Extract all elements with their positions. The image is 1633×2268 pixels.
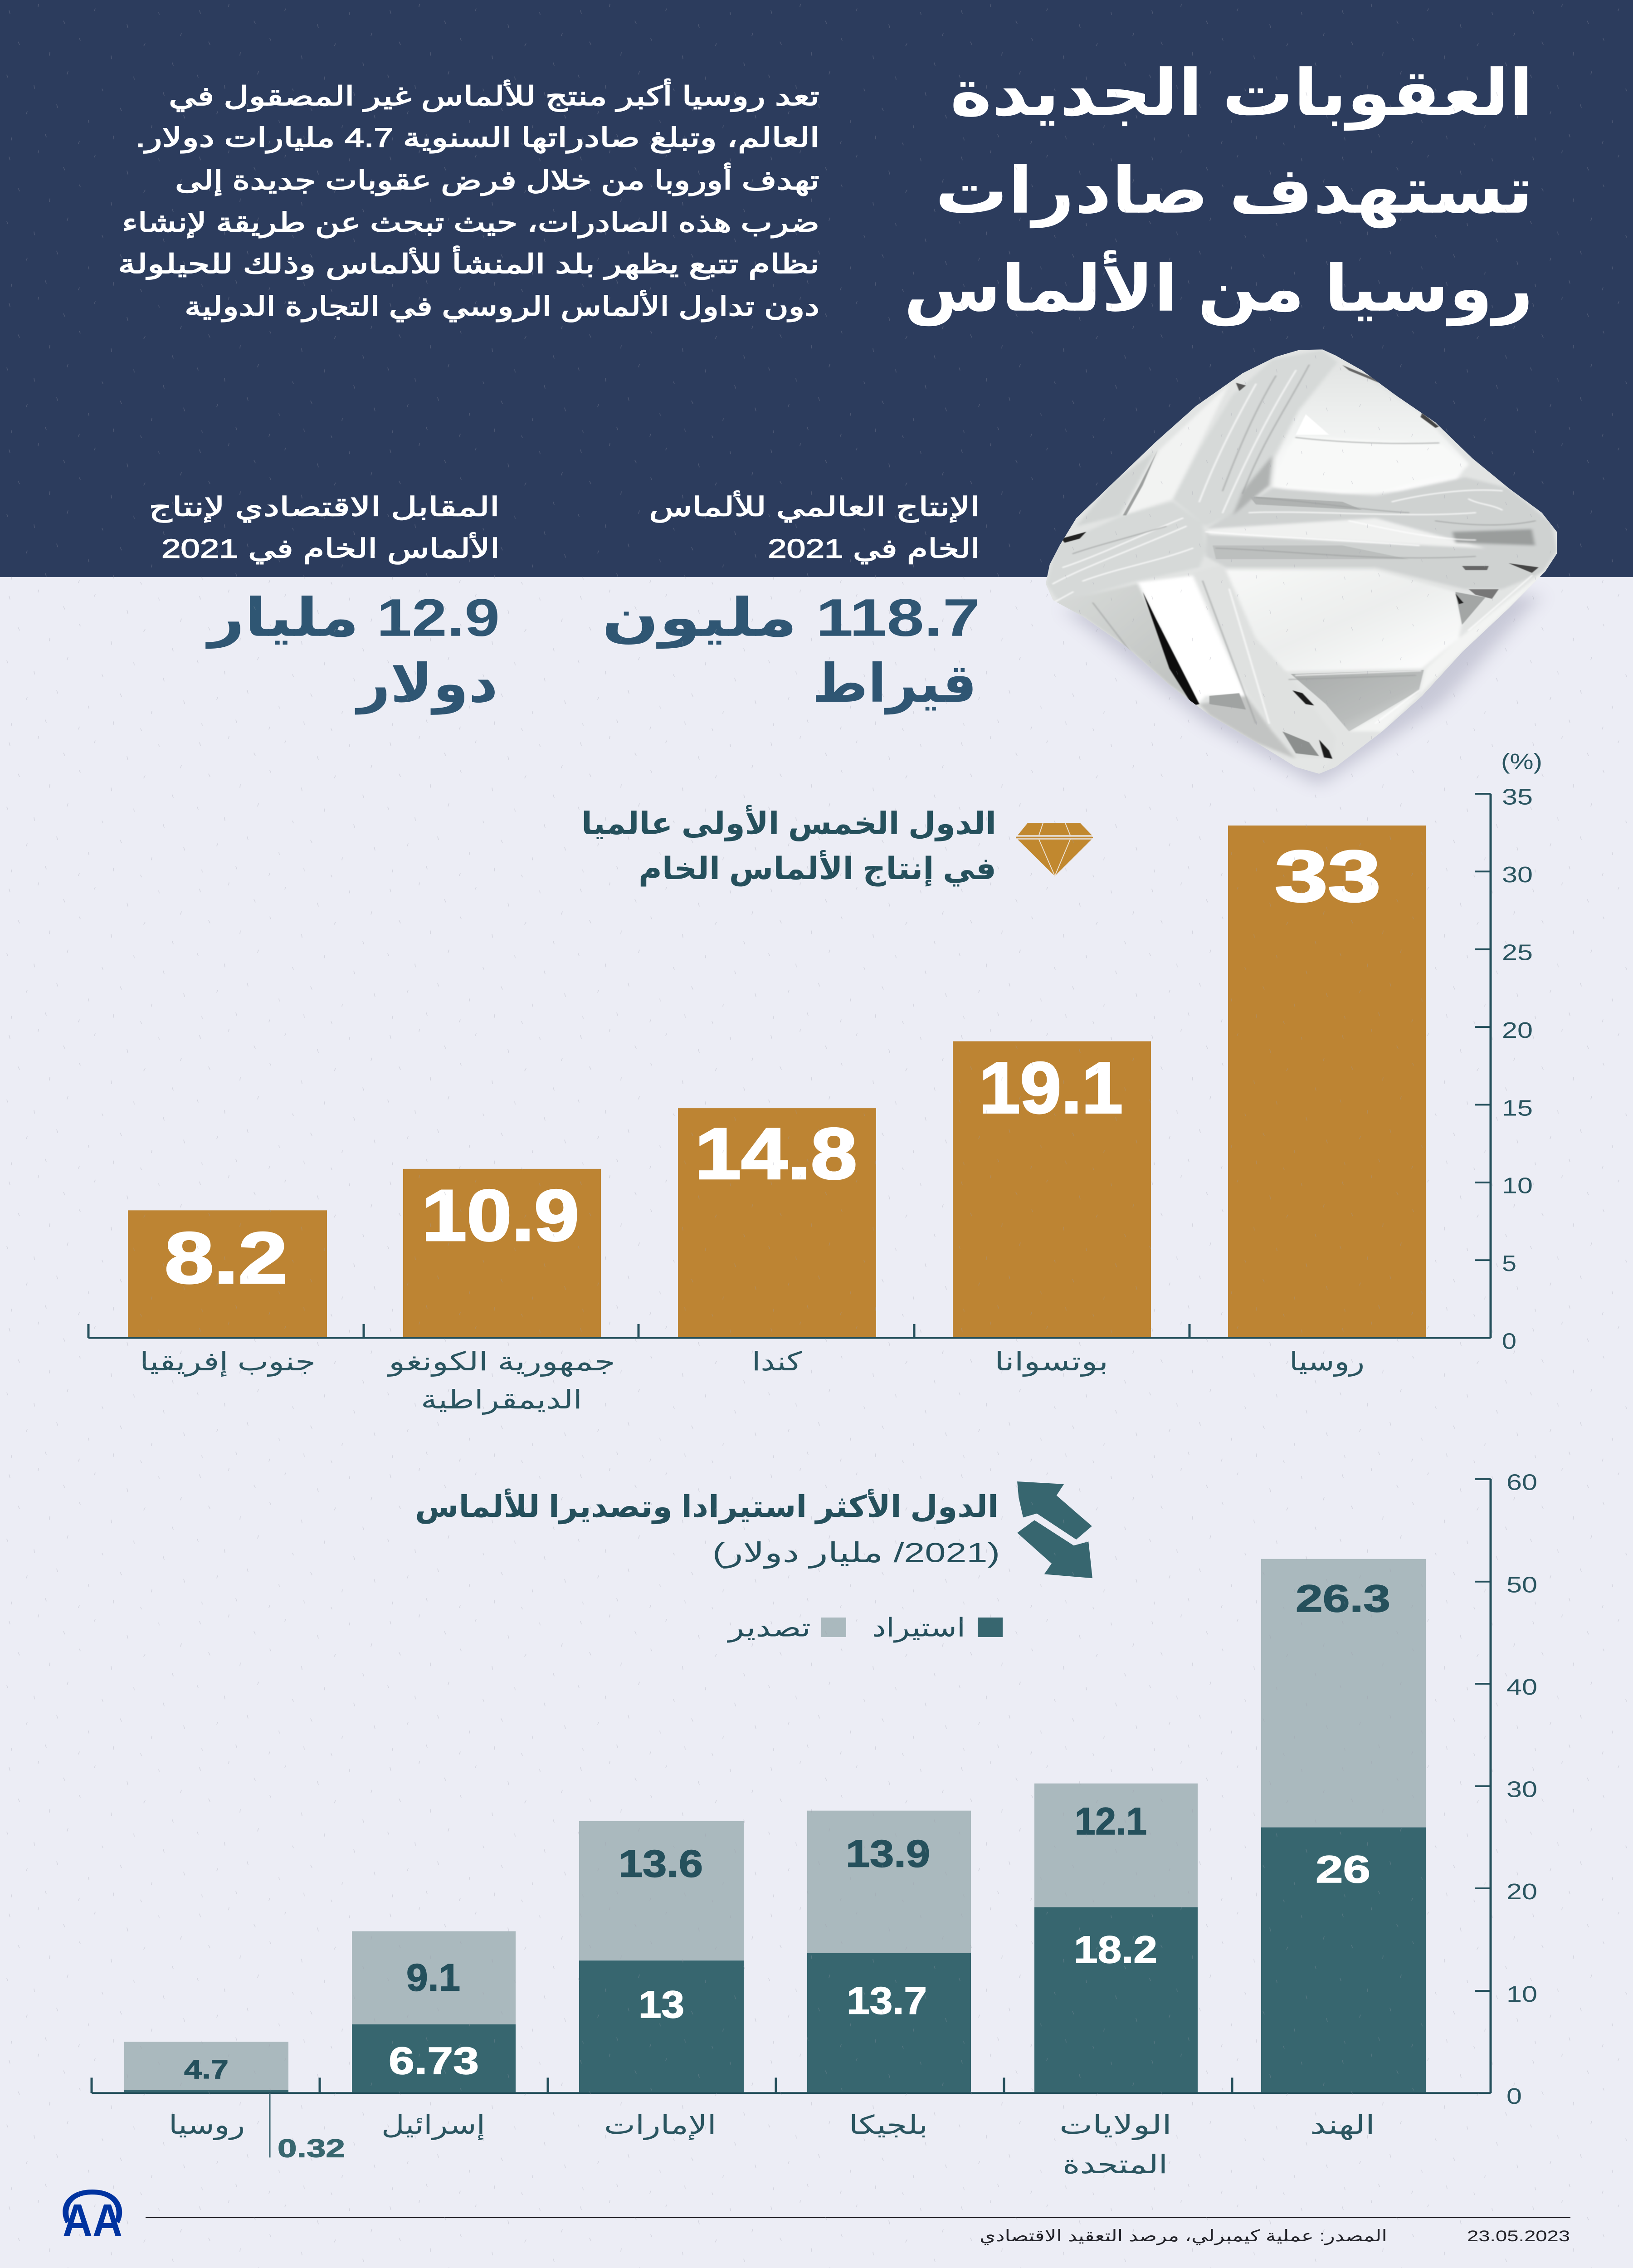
bar: India: 26 xyxy=(1316,1848,1370,1891)
icon: import export arrows xyxy=(1017,1481,1092,1578)
bar: Botswana xyxy=(953,1041,1151,1338)
y axis: 0 xyxy=(1506,2084,1522,2109)
intro paragraph: تعد روسيا أكبر منتج للألماس غير المصقول في xyxy=(169,78,819,112)
y axis xyxy=(1475,749,1542,1354)
intro paragraph: دون تداول الألماس الروسي في التجارة الدولية xyxy=(185,290,819,322)
bar: Israel: 6.73 xyxy=(389,2039,479,2082)
category labels: جمهورية الكونغو xyxy=(387,1347,615,1377)
stat label: الخام في 2021 xyxy=(768,534,980,564)
bar: United States xyxy=(1034,1784,1198,2093)
bar: UAE xyxy=(579,1821,744,2093)
y axis: 25 xyxy=(1502,940,1533,965)
category labels xyxy=(140,1347,1365,1415)
category labels: روسيا xyxy=(1289,1347,1365,1377)
category labels: إسرائيل xyxy=(381,2110,485,2141)
title: العقوبات الجديدة xyxy=(950,57,1533,131)
intro paragraph: تهدف أوروبا من خلال فرض عقوبات جديدة إلى xyxy=(175,163,819,196)
y axis: 20 xyxy=(1502,1018,1533,1043)
bar: Russia: 33 xyxy=(1275,836,1381,917)
intro paragraph: العالم، وتبلغ صادراتها السنوية 4.7 مليارات دولار. xyxy=(136,123,819,153)
chart heading: importers and exporters: (2021/ مليار دولار) xyxy=(712,1537,1000,1569)
chart heading: top five producers xyxy=(581,805,996,887)
bar: United States: 12.1 xyxy=(1075,1799,1147,1843)
y axis: 60 xyxy=(1506,1470,1537,1495)
y axis: 40 xyxy=(1506,1675,1537,1700)
footer rule xyxy=(146,2217,1570,2218)
bar: UAE: 13 xyxy=(639,1983,684,2026)
category labels: بلجيكا xyxy=(849,2110,928,2139)
y axis: 10 xyxy=(1502,1173,1533,1198)
y axis: (%) xyxy=(1501,749,1542,774)
category labels: جنوب إفريقيا xyxy=(140,1347,316,1377)
y axis: 20 xyxy=(1506,1879,1537,1904)
title: روسيا من الألماس xyxy=(904,249,1533,327)
y axis xyxy=(1475,1470,1537,2109)
category labels: الهند xyxy=(1310,2110,1375,2140)
legend: export: تصدير xyxy=(727,1613,811,1642)
stat label: المقابل الاقتصادي لإنتاج xyxy=(149,493,500,523)
category labels: الديمقراطية xyxy=(421,1385,582,1415)
bar: South Africa: 8.2 xyxy=(165,1217,288,1299)
title: تستهدف صادرات xyxy=(935,154,1533,228)
intro paragraph xyxy=(118,78,819,322)
y axis: 10 xyxy=(1506,1982,1537,2007)
y axis: 35 xyxy=(1502,785,1533,810)
y axis: 30 xyxy=(1506,1777,1537,1802)
category labels xyxy=(169,2110,1375,2179)
category labels: بوتسوانا xyxy=(994,1347,1108,1377)
date: 23.05.2023 xyxy=(1467,2228,1570,2245)
bar: Botswana: 19.1 xyxy=(979,1047,1123,1129)
y axis: 5 xyxy=(1502,1251,1516,1276)
stat value: قيراط xyxy=(812,654,977,714)
y axis: 50 xyxy=(1506,1573,1537,1598)
stat: economic value xyxy=(149,493,500,714)
stat value: 12.9 مليار xyxy=(205,588,500,649)
intro paragraph: نظام تتبع يظهر بلد المنشأ للألماس وذلك للحيلولة xyxy=(118,245,819,279)
bar: South Africa xyxy=(128,1210,327,1338)
chart heading: importers and exporters: الدول الأكثر استيرادا وتصديرا للألماس xyxy=(415,1488,999,1524)
bar: Belgium: 13.7 xyxy=(847,1979,927,2022)
stat label: الألماس الخام في 2021 xyxy=(161,533,500,564)
intro paragraph: ضرب هذه الصادرات، حيث تبحث عن طريقة لإنشاء xyxy=(122,208,819,238)
bar: Russia xyxy=(1228,826,1426,1338)
stat value: دولار xyxy=(355,654,498,714)
chart heading: top five producers: في إنتاج الألماس الخام xyxy=(639,850,996,887)
bar: Canada: 14.8 xyxy=(695,1113,857,1194)
y axis: 30 xyxy=(1502,862,1533,887)
legend xyxy=(727,1613,1003,1642)
bar: Israel: 9.1 xyxy=(406,1956,460,1999)
bar: DR Congo xyxy=(403,1169,601,1338)
bar: India: 26.3 xyxy=(1296,1577,1390,1620)
y axis: 0 xyxy=(1502,1329,1516,1354)
stat: world production xyxy=(602,490,980,714)
callout: Russia imports 0.32: 0.32 xyxy=(278,2134,345,2163)
bar: DR Congo: 10.9 xyxy=(422,1175,579,1256)
stat label xyxy=(649,490,980,564)
legend: export xyxy=(727,1613,846,1642)
y axis: 15 xyxy=(1502,1095,1533,1120)
category labels: المتحدة xyxy=(1063,2150,1168,2179)
bar: Russia: 4.7 xyxy=(184,2055,229,2084)
bar: India xyxy=(1261,1559,1426,2093)
icon: gem xyxy=(1016,823,1093,876)
bar: United States: 18.2 xyxy=(1074,1928,1157,1971)
source line: المصدر: عملية كيمبرلي، مرصد التعقيد الاقتصادي xyxy=(980,2227,1387,2245)
stat value xyxy=(205,588,500,714)
chart heading: top five producers: الدول الخمس الأولى عالميا xyxy=(581,805,996,841)
bar: Belgium xyxy=(807,1811,971,2093)
stacked bar chart: imports and exports xyxy=(92,1470,1537,2179)
bar chart: production share xyxy=(88,749,1542,1415)
category labels: كندا xyxy=(752,1347,802,1376)
legend: import: استيراد xyxy=(872,1613,965,1642)
stat label xyxy=(149,493,500,564)
logo: Anadolu Agency xyxy=(63,2190,122,2246)
bar: Canada xyxy=(678,1108,876,1338)
category labels: الإمارات xyxy=(604,2110,717,2140)
stat value: 118.7 مليون xyxy=(602,588,980,649)
bar: Russia xyxy=(124,2042,288,2093)
bar: Israel xyxy=(352,1931,516,2093)
category labels: روسيا xyxy=(169,2110,245,2140)
chart heading: importers and exporters xyxy=(415,1488,1000,1569)
bar: UAE: 13.6 xyxy=(619,1842,703,1885)
category labels: الولايات xyxy=(1059,2110,1172,2140)
stat value xyxy=(602,588,980,714)
bar: Belgium: 13.9 xyxy=(846,1832,930,1875)
header panel xyxy=(0,0,1633,577)
diamond photo illustration xyxy=(1043,349,1565,786)
title xyxy=(904,57,1533,327)
stat label: الإنتاج العالمي للألماس xyxy=(649,490,980,523)
logo: Anadolu Agency: AA xyxy=(63,2195,122,2246)
